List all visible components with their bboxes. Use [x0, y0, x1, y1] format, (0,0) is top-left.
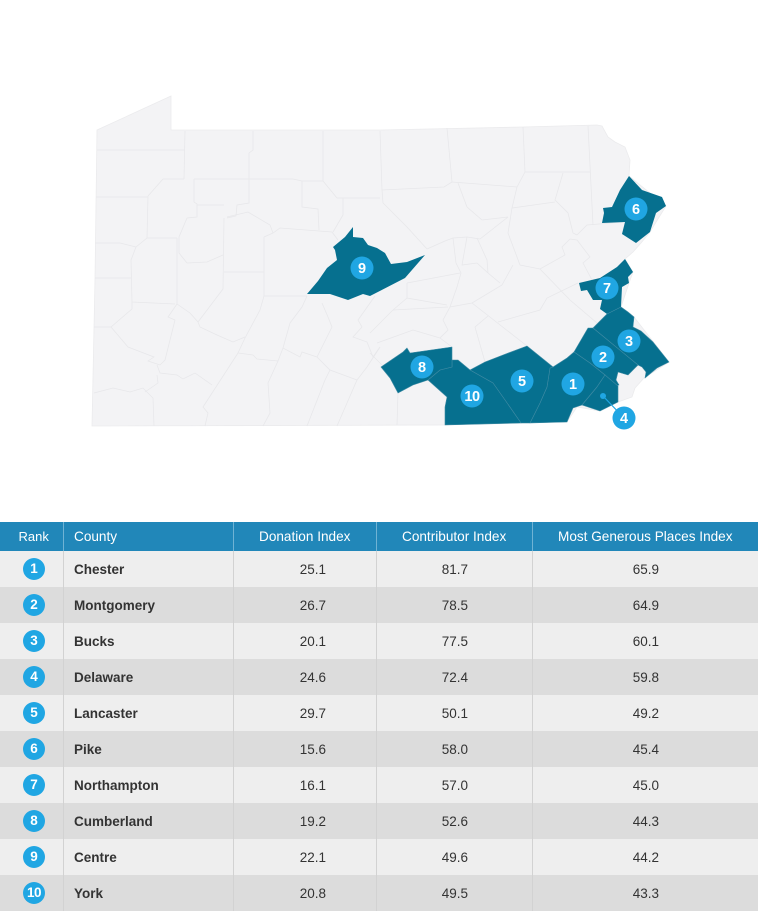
row: Pike	[0, 731, 758, 767]
row: Pike: 58.0	[442, 742, 468, 757]
ranking table	[0, 522, 758, 911]
row: Lancaster: 50.1	[442, 706, 468, 721]
row: Cumberland: 52.6	[442, 814, 468, 829]
row: Centre: 49.6	[442, 850, 468, 865]
row: Cumberland: 44.3	[633, 814, 659, 829]
row: York: 20.8	[300, 886, 326, 901]
row: Pike: 15.6	[300, 742, 326, 757]
row: Centre: 9	[30, 849, 38, 864]
table header	[0, 522, 758, 551]
row: York: 10	[27, 885, 41, 900]
row: Cumberland: 8	[30, 813, 38, 828]
badge 6: 6	[632, 202, 640, 218]
row: Montgomery: 26.7	[300, 598, 326, 613]
badge 2: 2	[599, 350, 607, 366]
badge 10: 10	[464, 389, 480, 405]
row: Cumberland: Cumberland	[74, 814, 153, 829]
row: Chester	[0, 551, 758, 587]
row: Northampton	[0, 767, 758, 803]
row: Bucks: Bucks	[74, 634, 115, 649]
row: Pike: Pike	[74, 742, 102, 757]
county: York	[428, 360, 521, 425]
row: Northampton: Northampton	[74, 778, 159, 793]
badge 3: 3	[625, 334, 633, 350]
county: Montgomery	[574, 328, 638, 386]
county: Delaware	[582, 375, 618, 411]
badge 7: 7	[603, 281, 611, 297]
row: Montgomery: 78.5	[442, 598, 468, 613]
row: Montgomery: Montgomery	[74, 598, 155, 613]
badge 8	[410, 356, 434, 378]
row: Delaware: 59.8	[633, 670, 659, 685]
row: Northampton: 7	[30, 777, 38, 792]
row: York	[0, 875, 758, 911]
county: Bucks	[593, 307, 669, 378]
row: Chester: 81.7	[442, 562, 468, 577]
badge 10	[460, 384, 484, 408]
county: Lancaster	[470, 346, 553, 423]
row: Pike: 45.4	[633, 742, 659, 757]
row: Montgomery: 64.9	[633, 598, 659, 613]
county: Centre	[307, 227, 425, 300]
table header: Most Generous Places Index	[558, 529, 733, 544]
row: Bucks: 20.1	[300, 634, 326, 649]
row: York: York	[74, 886, 103, 901]
row: Delaware: 72.4	[442, 670, 468, 685]
row: Bucks: 3	[30, 633, 38, 648]
badge 6	[624, 198, 648, 220]
row: Bucks: 77.5	[442, 634, 468, 649]
row: Lancaster: 49.2	[633, 706, 659, 721]
badge 7	[596, 276, 618, 300]
row: Chester: 65.9	[633, 562, 659, 577]
row: Lancaster	[0, 695, 758, 731]
badge 4	[612, 406, 636, 430]
row: Northampton: 45.0	[633, 778, 659, 793]
callout line: Delaware	[600, 393, 624, 418]
badge 3	[618, 330, 640, 352]
row: Cumberland: 19.2	[300, 814, 326, 829]
row: Chester: Chester	[74, 562, 124, 577]
row: Delaware: Delaware	[74, 670, 133, 685]
badge 5	[510, 370, 534, 392]
row: Lancaster: 29.7	[300, 706, 326, 721]
badge 8: 8	[418, 360, 426, 376]
row: Chester: 1	[30, 561, 38, 576]
row: Delaware: 4	[30, 669, 38, 684]
table header: Contributor Index	[402, 529, 506, 544]
row: Lancaster: Lancaster	[74, 706, 138, 721]
row: Bucks	[0, 623, 758, 659]
row: Northampton: 57.0	[442, 778, 468, 793]
row: Pike: 6	[30, 741, 38, 756]
badge 4: 4	[620, 411, 628, 427]
row: Montgomery: 2	[30, 597, 38, 612]
badge 5: 5	[518, 374, 526, 390]
map of Pennsylvania counties	[92, 96, 670, 430]
row: Bucks: 60.1	[633, 634, 659, 649]
state outline	[92, 96, 669, 426]
highlighted counties	[307, 176, 669, 425]
badge 2	[592, 346, 614, 368]
badge 1	[562, 372, 584, 396]
row: Delaware	[0, 659, 758, 695]
badge 1: 1	[569, 377, 577, 393]
row: Centre: 44.2	[633, 850, 659, 865]
row: Northampton: 16.1	[300, 778, 326, 793]
row: Delaware: 24.6	[300, 670, 326, 685]
row: Centre: Centre	[74, 850, 117, 865]
county: Pike	[602, 176, 666, 243]
row: Montgomery	[0, 587, 758, 623]
row: York: 49.5	[442, 886, 468, 901]
table header: County	[74, 529, 117, 544]
row: Cumberland	[0, 803, 758, 839]
table header: Rank	[18, 529, 49, 544]
badge 9	[350, 256, 374, 280]
row: York: 43.3	[633, 886, 659, 901]
county boundary lines	[94, 126, 623, 426]
county: Cumberland	[381, 347, 452, 393]
row: Lancaster: 5	[30, 705, 38, 720]
county: Chester	[530, 352, 605, 423]
row: Centre: 22.1	[300, 850, 326, 865]
badge 9: 9	[358, 261, 366, 277]
row: Centre	[0, 839, 758, 875]
row: Chester: 25.1	[300, 562, 326, 577]
table header: Donation Index	[259, 529, 350, 544]
county: Northampton	[579, 259, 633, 314]
